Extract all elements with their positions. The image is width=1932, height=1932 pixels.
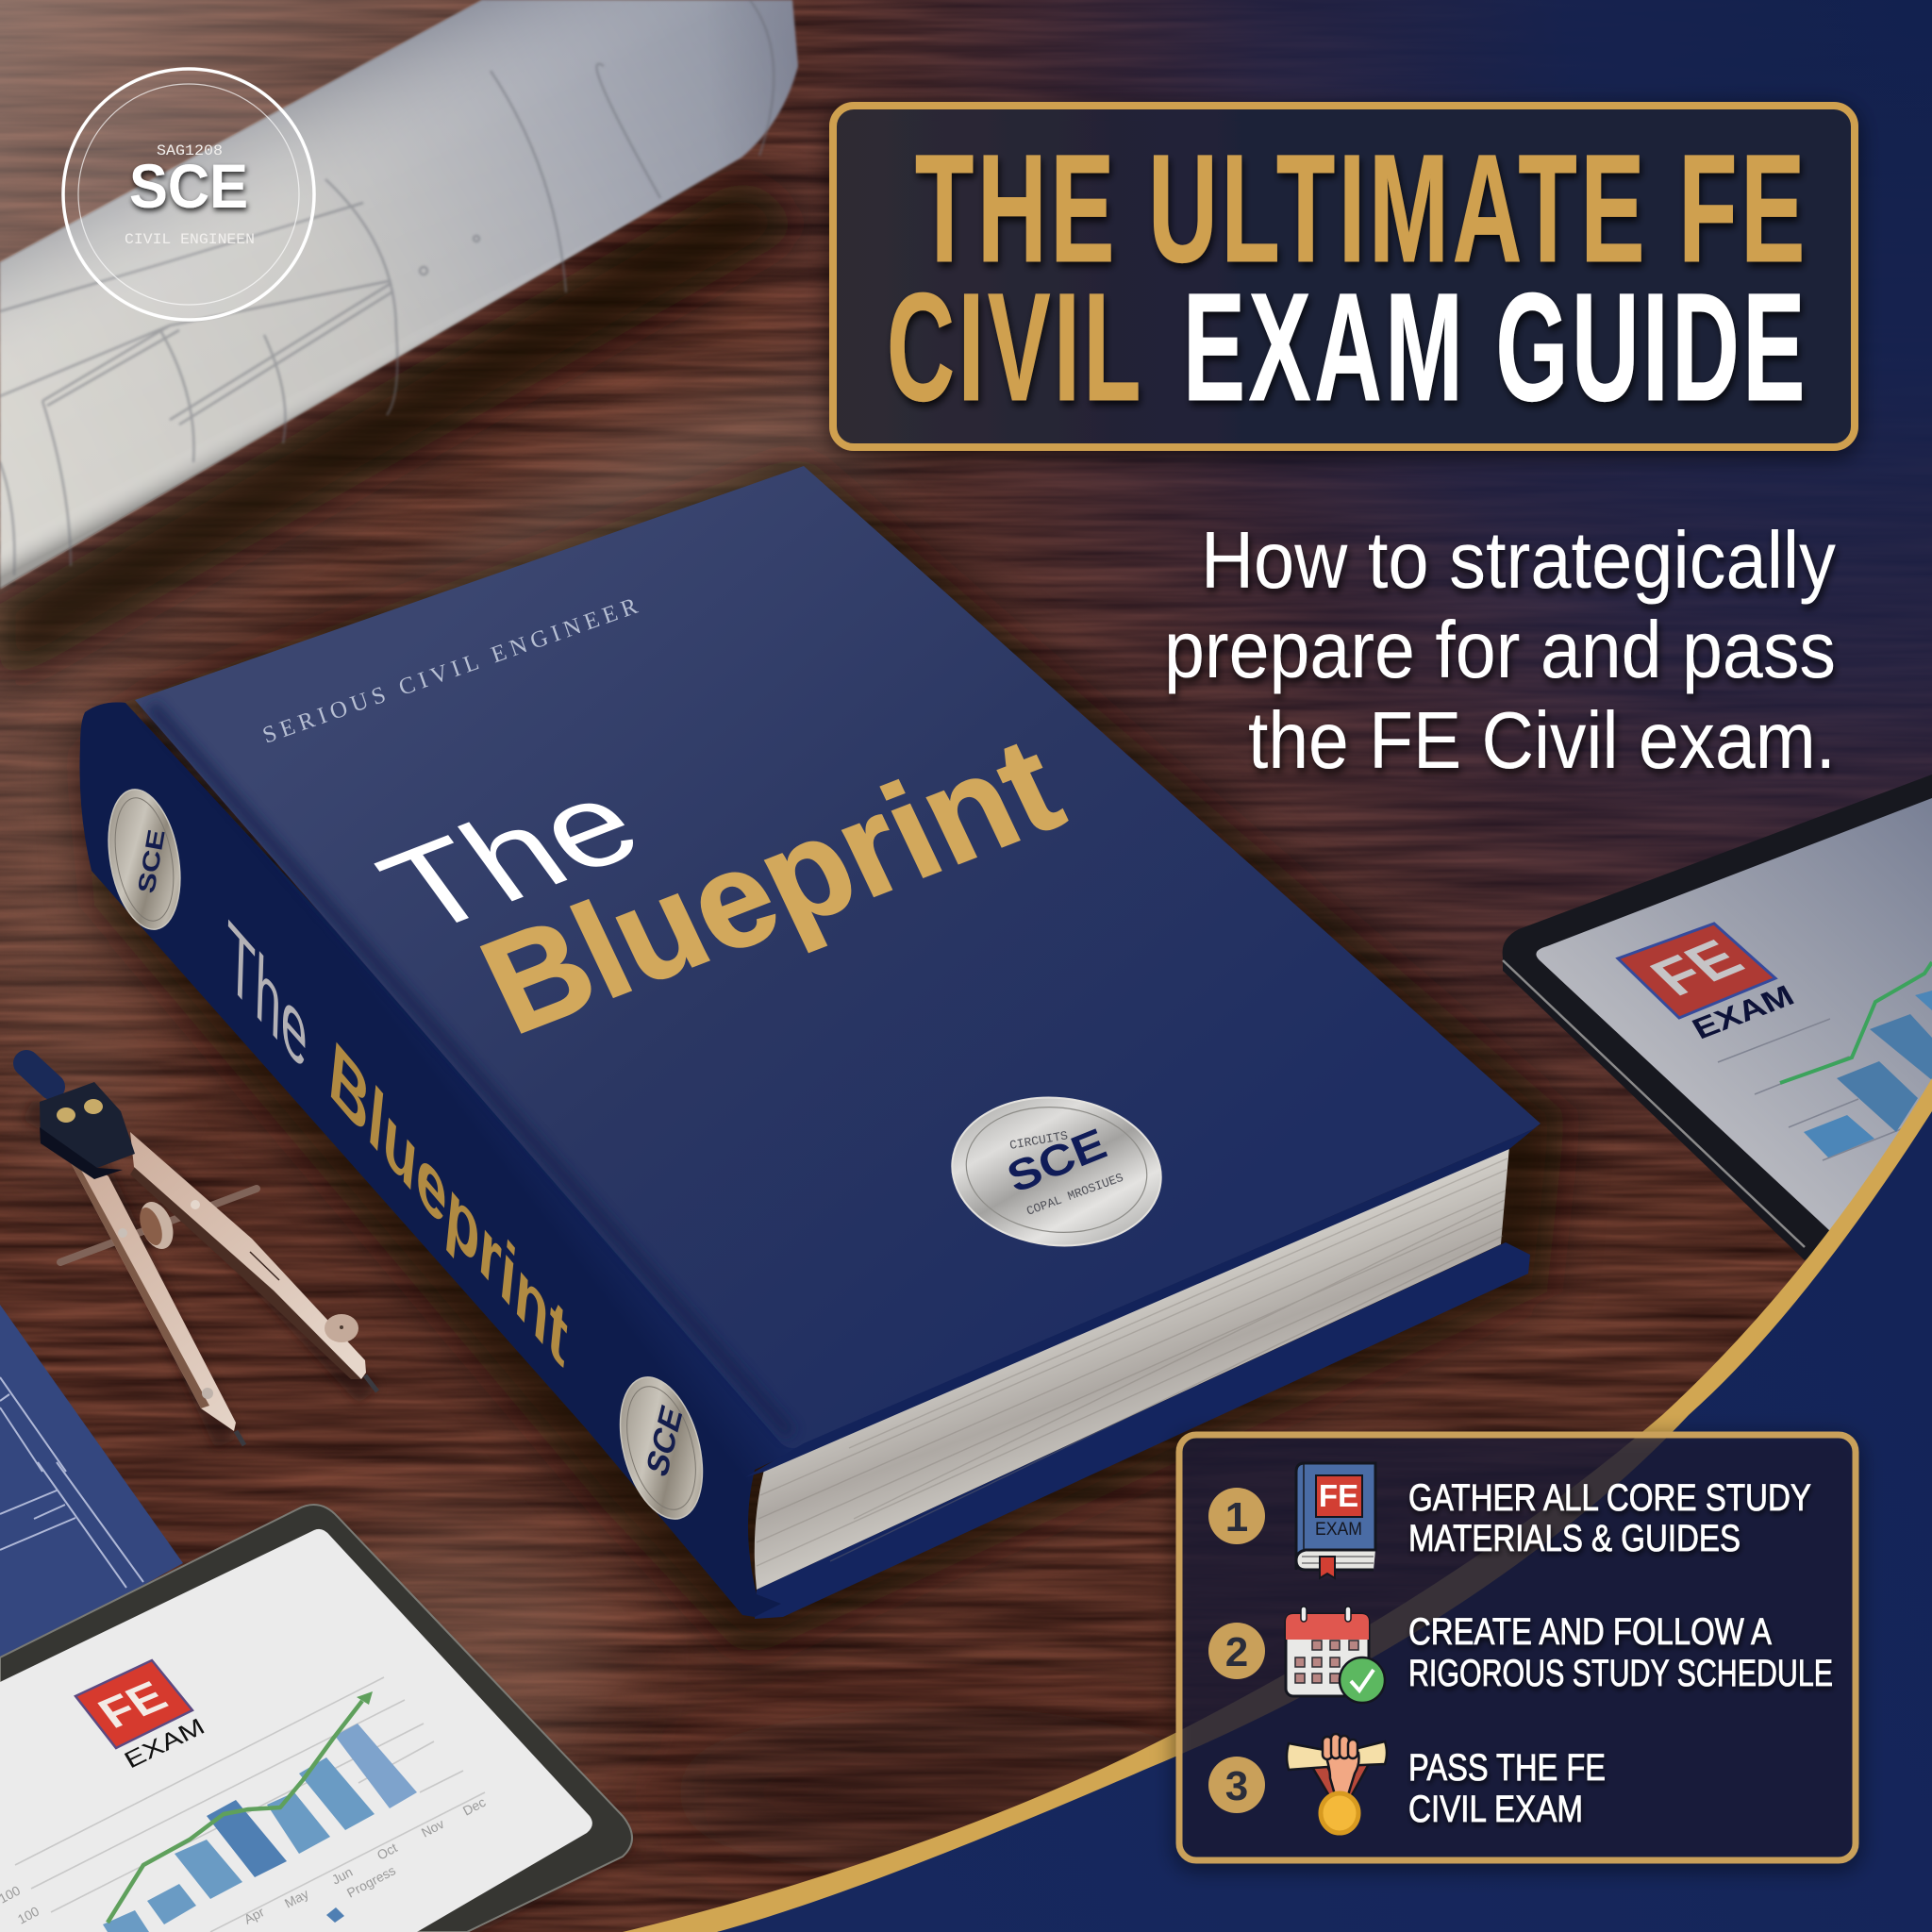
logo badge: SCE <box>63 69 314 320</box>
subtitle: prepare for and pass <box>1164 606 1836 695</box>
tablet FE logo: EXAM <box>120 1713 209 1774</box>
title panel <box>833 106 1855 447</box>
title line 2: CIVIL: CIVIL <box>887 260 1144 433</box>
step 2 text: CREATE AND FOLLOW A <box>1408 1611 1772 1653</box>
tablet month labels: Progress <box>344 1862 398 1901</box>
logo badge: SCE: SAG1208 <box>157 142 223 159</box>
step 3 number <box>1208 1757 1265 1813</box>
cover seal <box>944 1088 1169 1256</box>
logo badge: SCE: SCE <box>129 151 248 221</box>
hinge groove <box>151 706 791 1434</box>
tablet month labels: Oct <box>375 1840 400 1863</box>
cover title: Blueprint: Blueprint <box>459 708 1082 1062</box>
icon: calendar with check <box>1286 1607 1385 1703</box>
subtitle: How to strategically <box>1201 516 1836 606</box>
tablet frame <box>0 1505 632 1932</box>
spine seal, bottom: SCE <box>641 1400 690 1483</box>
rolled blueprint <box>0 0 811 689</box>
tablet month labels: May <box>282 1886 311 1911</box>
step 3 text <box>1408 1747 1606 1830</box>
step 1 text: GATHER ALL CORE STUDY <box>1408 1477 1811 1519</box>
tablet month labels: Jun <box>329 1864 355 1888</box>
cover seal: COPAL MROSIUES <box>1024 1171 1125 1219</box>
step 1 number: 1 <box>1225 1494 1248 1541</box>
spine title: The: The <box>225 898 308 1093</box>
icon: exam book: EXAM <box>1315 1520 1362 1540</box>
right tablet FE logo <box>1618 924 1800 1045</box>
right tablet screen <box>1536 798 1932 1231</box>
tablet bar chart <box>103 1724 417 1932</box>
tablet growth line <box>108 1691 373 1923</box>
step 2 text <box>1408 1611 1833 1694</box>
spine seal, top <box>99 784 190 935</box>
step 1 text <box>1408 1477 1811 1559</box>
spine <box>79 702 811 1617</box>
navy curved corner with gold band <box>623 1078 1932 1932</box>
tablet month labels: Apr <box>242 1904 267 1927</box>
page block <box>755 1146 1509 1590</box>
tablet, lower left <box>0 1505 637 1932</box>
icon: hand with diploma and medal <box>1287 1734 1387 1833</box>
spine seal, bottom <box>606 1368 717 1528</box>
step 3 number: 3 <box>1225 1763 1248 1809</box>
right tablet FE logo: EXAM <box>1686 978 1800 1045</box>
cover seal: CIRCUITS <box>1008 1128 1069 1153</box>
icon: exam book <box>1296 1463 1375 1578</box>
back cover <box>755 1242 1530 1619</box>
front cover <box>135 466 1541 1448</box>
right tablet chart <box>1718 962 1932 1160</box>
icon: exam book: FE <box>1319 1478 1358 1513</box>
logo badge: SCE: CIVIL ENGINEEN <box>125 231 255 248</box>
navy corner glow, upper right <box>0 0 1932 1226</box>
cover imprint text: SERIOUS CIVIL ENGINEER <box>259 593 641 749</box>
tablet FE logo <box>75 1660 209 1774</box>
step 2 number <box>1208 1623 1265 1679</box>
step 1 number <box>1208 1488 1265 1544</box>
tablet month labels: Nov <box>419 1816 446 1840</box>
subtitle: the FE Civil exam. <box>1248 696 1836 786</box>
book <box>79 453 1566 1660</box>
step 3 text: CIVIL EXAM <box>1408 1789 1583 1830</box>
step 3 text: PASS THE FE <box>1408 1747 1606 1789</box>
cover title: The: The <box>355 755 665 958</box>
cover seal: SCE <box>1000 1119 1113 1202</box>
tablet month labels <box>0 1794 488 1927</box>
tablet, right <box>1503 774 1932 1260</box>
spine seal, top: SCE <box>132 827 170 895</box>
right tablet FE logo: FE <box>1637 929 1757 1007</box>
steps panel <box>1179 1435 1856 1860</box>
step 1 text: MATERIALS & GUIDES <box>1408 1518 1740 1559</box>
tablet month labels: Dec <box>460 1794 488 1819</box>
subtitle <box>1164 516 1836 786</box>
blueprint sheet, lower left <box>0 1305 183 1665</box>
step 2 number: 2 <box>1225 1629 1248 1675</box>
tablet screen <box>0 1529 592 1932</box>
icon: drafting compass <box>26 1063 377 1445</box>
tablet FE logo: FE <box>90 1674 176 1738</box>
tablet month labels: 100 <box>15 1903 42 1927</box>
spine title: Blueprint: Blueprint <box>325 1021 571 1386</box>
